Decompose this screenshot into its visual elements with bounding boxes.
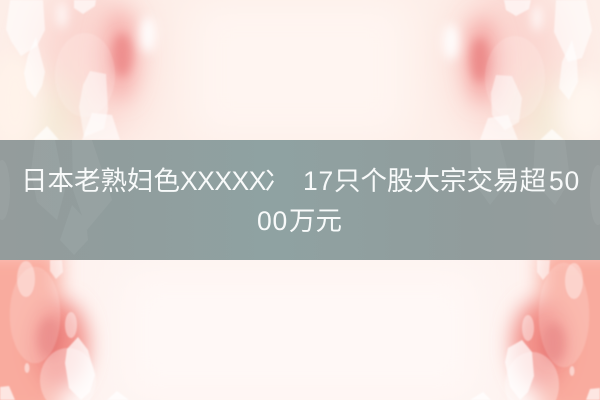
heading text: XXXXX xyxy=(180,166,266,196)
heading text: 只个股大宗交易超 xyxy=(334,166,546,196)
heading text xyxy=(21,166,580,236)
heading text: 万元 xyxy=(289,206,342,236)
bokeh shapes: bottom right xyxy=(470,260,600,400)
heading text: 冫 xyxy=(264,166,290,196)
heading text: 00 xyxy=(257,206,288,236)
heading text: 17 xyxy=(303,166,334,196)
heading text: 50 xyxy=(549,166,580,196)
title band xyxy=(0,140,600,260)
bokeh shapes: bottom left xyxy=(0,260,129,400)
bokeh shapes: top left xyxy=(6,0,120,140)
heading text: 日本老熟妇色 xyxy=(21,166,180,196)
bokeh shapes: top right xyxy=(480,0,592,140)
